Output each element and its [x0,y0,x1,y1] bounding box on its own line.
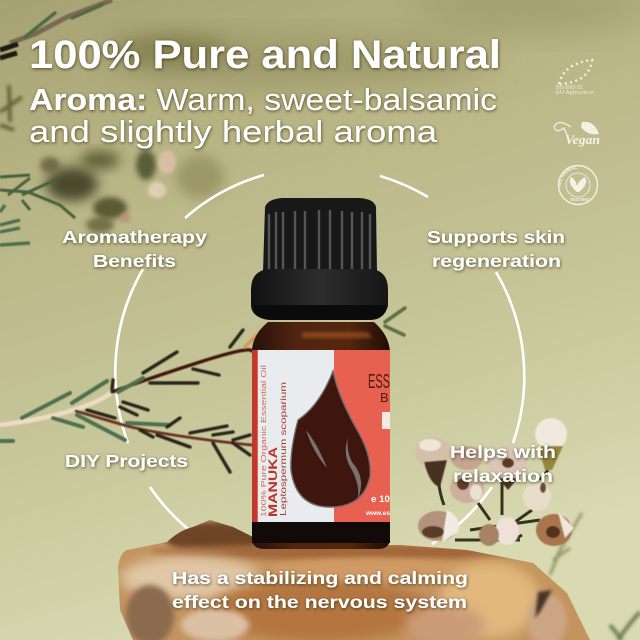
glass body [252,322,390,549]
ring arcs [115,175,524,545]
flower buds [415,418,574,546]
blurred foliage backdrop [0,0,640,245]
label: www.es [365,510,390,517]
label: stabilizing and calming: effect on the nervous system [172,592,467,612]
icon: EU organic leaf [556,60,594,96]
label: helps with relaxation: Helps with [450,442,556,462]
icon: vegan: Vegan [565,132,600,147]
cap [251,198,388,320]
title: 100% Pure and Natural [29,33,501,77]
icon: no animal testing: TESTING [570,197,590,202]
label: helps with relaxation: relaxation [453,466,553,486]
label: supports skin regeneration: regeneration [432,251,561,271]
label: DIY projects: DIY Projects [65,451,188,471]
label [252,350,390,522]
vertical label text: 100% Pure Organic Essential Oil [259,365,268,517]
label: aromatherapy benefits: Benefits [93,251,176,271]
manuka flowers [415,418,640,640]
label: Leptospermum scoparium [278,382,288,516]
label: e 10 [371,494,390,504]
twigs left of bottle [0,330,262,472]
icon: vegan [554,122,600,147]
aroma description [29,82,497,149]
icon: EU organic leaf: EU Agriculture [556,90,594,96]
label: supports skin regeneration: Supports skin [427,227,565,247]
drop [291,371,370,507]
label: aromatherapy benefits [62,227,207,271]
icon: no animal testing [558,164,598,206]
label: supports skin regeneration [427,227,565,271]
brand text: ESS [368,371,390,393]
aroma description: Aroma: Warm, sweet-balsamic [29,82,497,117]
icon: EU organic leaf: BG-BIO-21 [556,85,583,91]
aroma description: and slightly herbal aroma [29,114,438,149]
label: stabilizing and calming: Has a stabilizing and calming [172,568,468,588]
twig top left [0,0,112,58]
icon: no animal testing: NO ANIMAL [558,166,578,186]
label: B [380,390,389,405]
twig right of bottle [385,308,405,335]
bottle [251,198,390,549]
label: MANUKA [266,447,280,517]
label: helps with relaxation [450,442,556,486]
label: aromatherapy benefits: Aromatherapy [62,227,207,247]
label: stabilizing and calming [172,568,468,612]
rock [110,515,600,640]
